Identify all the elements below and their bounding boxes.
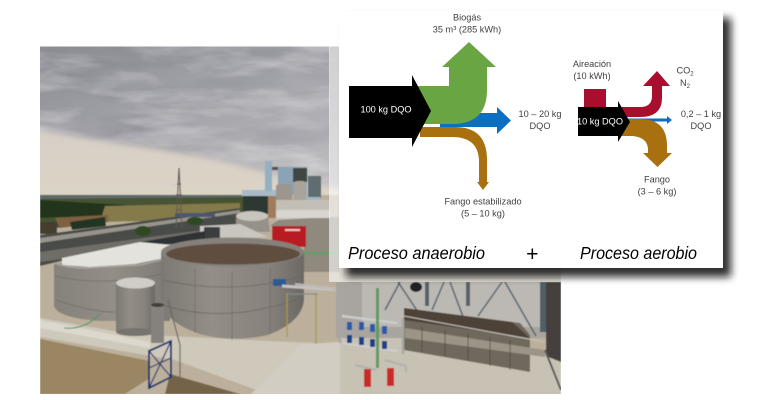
- brown sludge arrow: [620, 119, 672, 167]
- sky with clouds: [40, 46, 339, 200]
- small silo: [116, 278, 155, 336]
- aeration input block: [584, 89, 606, 109]
- blue frame and hopper: [149, 300, 180, 388]
- anaerobic diagram labels: Fango estabilizado: [444, 196, 522, 206]
- anaerobic diagram labels: 35 m³ (285 kWh): [433, 24, 501, 34]
- aerobic diagram labels: N: [680, 78, 687, 88]
- telecom tower: [172, 168, 182, 228]
- anaerobic diagram labels: Biogás: [453, 12, 481, 22]
- aerobic sankey diagram: [578, 71, 672, 167]
- panel: sankey diagrams: [339, 11, 723, 268]
- anaerobic diagram labels: DQO: [530, 121, 550, 131]
- ground: [40, 195, 561, 395]
- pipes and supports: [64, 284, 350, 344]
- anaerobic diagram labels: [360, 12, 561, 218]
- anaerobic sankey diagram: [349, 42, 511, 190]
- left tank with white roof: [54, 242, 172, 321]
- building and dome tanks behind: [135, 210, 340, 272]
- right plant wall: [336, 282, 561, 394]
- plus sign: +: [526, 243, 538, 266]
- anaerobic diagram labels: 100 kg DQO: [360, 104, 412, 114]
- distant landscape: [40, 195, 260, 266]
- anaerobic diagram labels: (5 – 10 kg): [461, 208, 505, 218]
- aerobic diagram labels: DQO: [691, 121, 711, 131]
- green biogas arrow: [415, 42, 496, 124]
- aerobic diagram labels: [573, 59, 721, 196]
- settling basin: [404, 308, 561, 390]
- aerobic diagram labels: Fango: [644, 174, 670, 184]
- pale concrete walkways: [40, 318, 365, 395]
- aerobic diagram labels: 2: [690, 72, 694, 78]
- factory silos in background: [242, 161, 330, 222]
- heading: aerobic process: Proceso aerobio: [580, 243, 697, 263]
- aerobic diagram labels: Aireación: [573, 59, 611, 69]
- aerobic diagram labels: 2: [687, 84, 691, 90]
- heading: anaerobic process: Proceso anaerobio: [348, 243, 485, 263]
- aerobic diagram labels: CO: [676, 66, 690, 76]
- brown sludge arrow: [420, 127, 489, 190]
- aerobic diagram labels: (3 – 6 kg): [638, 186, 676, 196]
- panel shadow: [346, 18, 731, 277]
- main tank with sludge: [161, 238, 304, 340]
- red gas arrow: [615, 71, 670, 117]
- photo: wastewater treatment plant: [30, 46, 561, 395]
- black input arrow: [578, 101, 630, 142]
- pumps and pipe rack: [340, 288, 406, 387]
- black input arrow: [349, 75, 431, 147]
- translucent halo around diagram panel: [329, 46, 561, 282]
- aerobic diagram labels: 10 kg DQO: [577, 116, 623, 126]
- aerobic diagram labels: 0,2 – 1 kg: [681, 109, 721, 119]
- anaerobic diagram labels: 10 – 20 kg: [519, 109, 561, 119]
- aerobic diagram labels: (10 kWh): [573, 71, 611, 81]
- blue effluent arrow: [625, 116, 672, 124]
- blue effluent arrow: [440, 107, 511, 134]
